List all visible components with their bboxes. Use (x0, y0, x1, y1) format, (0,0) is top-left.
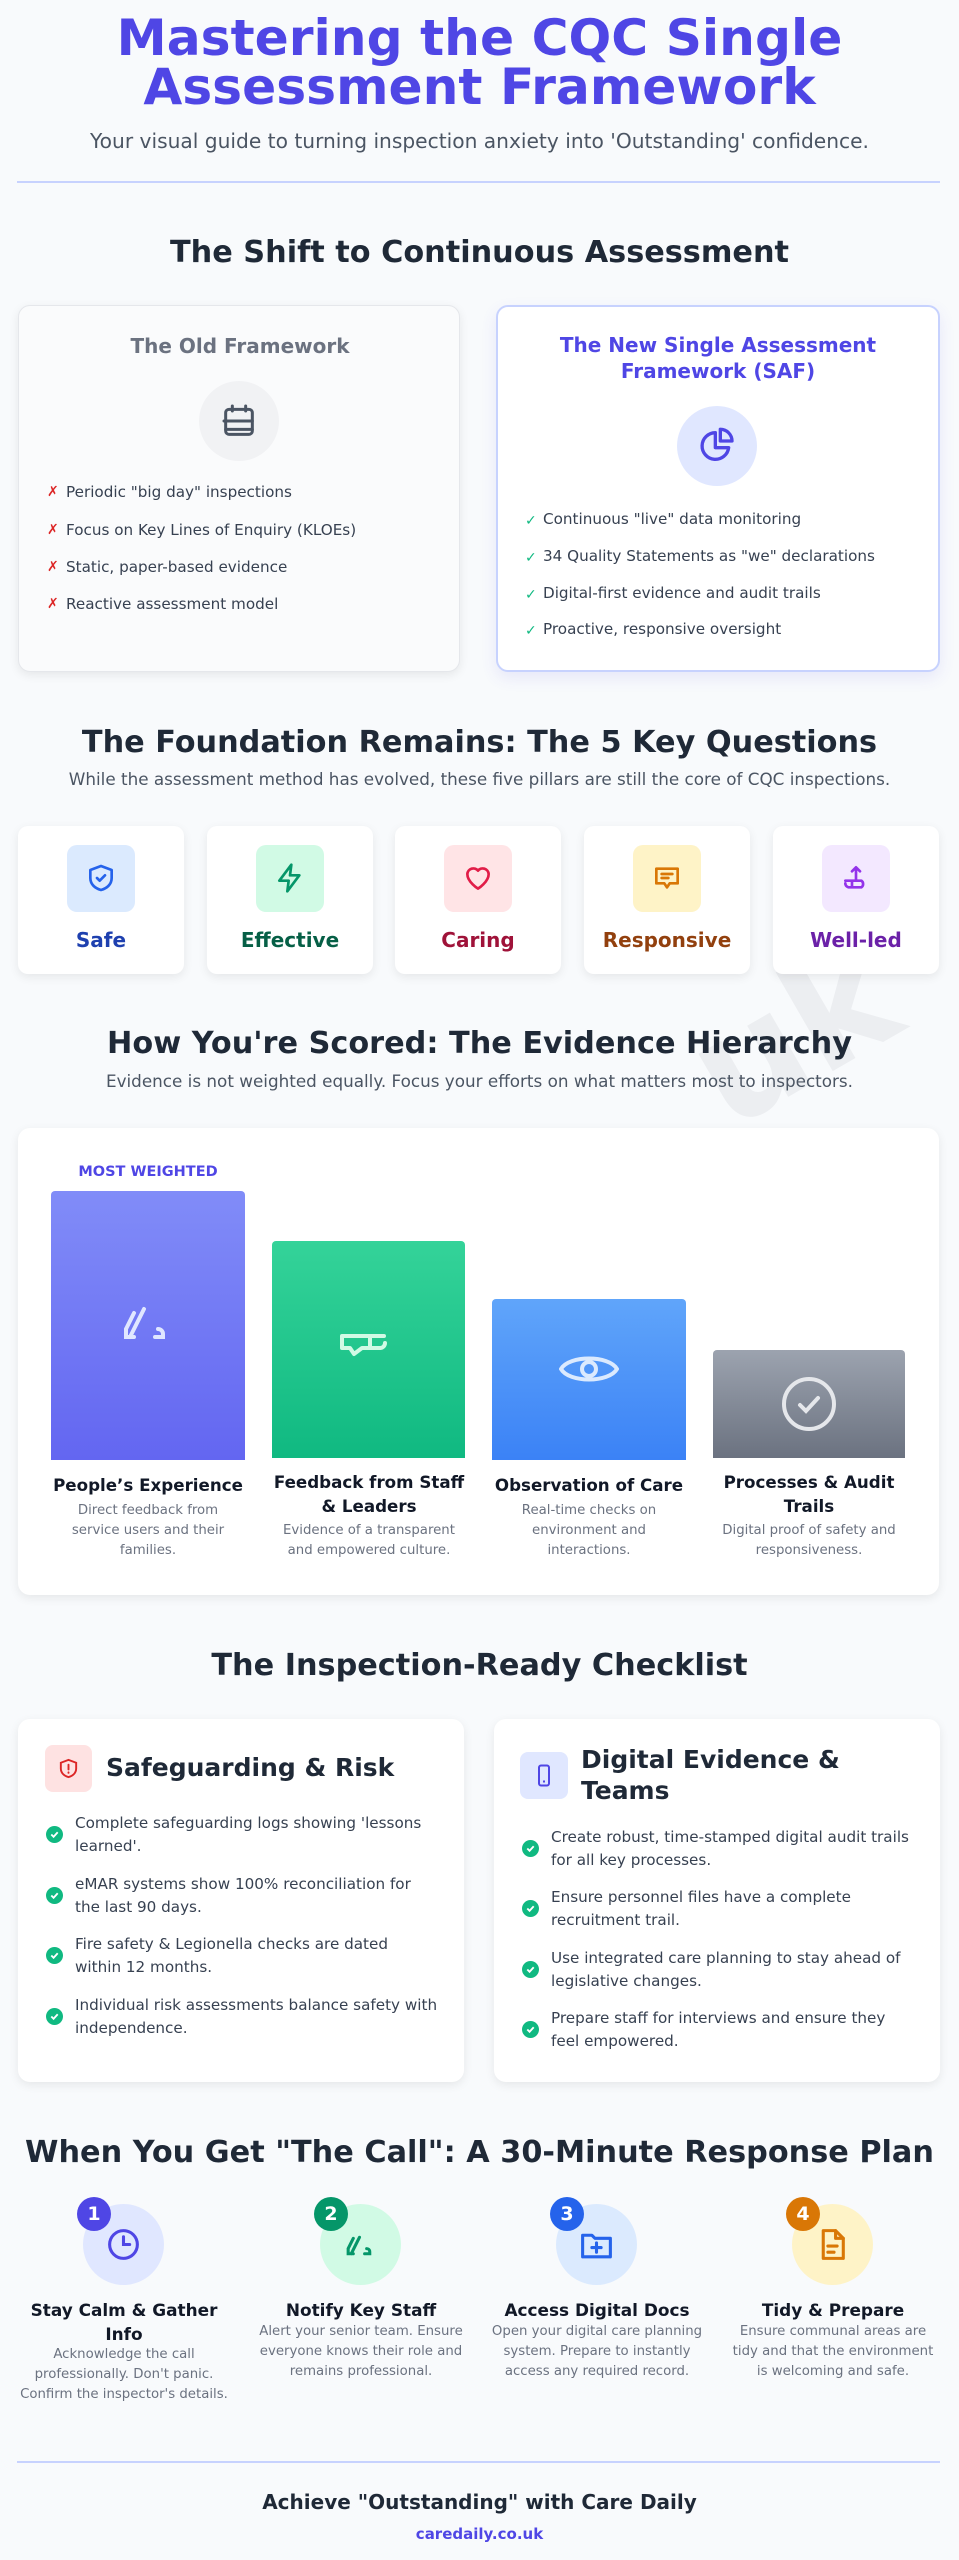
digital heading (581, 1745, 840, 1805)
icon: calendar (199, 381, 279, 461)
new title (560, 333, 876, 383)
new list: Continuous "live" data monitoring (543, 510, 801, 528)
new list: ✓ (525, 623, 537, 639)
bar: processes (713, 1350, 905, 1458)
bar: observation of care (492, 1299, 686, 1460)
step 2: everyone knows their role and (260, 2344, 462, 2359)
digital heading: Digital Evidence & (581, 1745, 840, 1774)
safeguarding list: Complete safeguarding logs showing 'lessons (75, 1814, 421, 1832)
step 1: Info (105, 2324, 143, 2344)
new list: 34 Quality Statements as "we" declarations (543, 547, 875, 565)
old list: Static, paper-based evidence (66, 558, 287, 576)
pillar: well-led (773, 826, 939, 974)
safeguarding list: Individual risk assessments balance safety with (75, 1996, 437, 2014)
new list: ✓ (525, 513, 537, 529)
step 4: is welcoming and safe. (757, 2364, 909, 2379)
bar label: processes: Trails (784, 1496, 834, 1516)
bar label: feedback: Evidence of a transparent (283, 1523, 455, 1538)
old list: Reactive assessment model (66, 595, 278, 613)
foundation subtitle: While the assessment method has evolved, these five pillars are still the core of CQC inspections. (69, 769, 890, 789)
step 3: access any required record. (505, 2364, 689, 2379)
step 3: 3 (560, 2203, 574, 2225)
old list: ✗ (47, 484, 59, 500)
step 3: Open your digital care planning (492, 2324, 702, 2339)
new title: The New Single Assessment (560, 333, 876, 357)
digital heading: Teams (581, 1776, 670, 1805)
old list: ✗ (47, 522, 59, 538)
step 1: Confirm the inspector's details. (20, 2387, 228, 2402)
digital list: recruitment trail. (551, 1911, 680, 1929)
new list (525, 510, 875, 639)
bar label: processes: Digital proof of safety and (722, 1523, 896, 1538)
subtitle: Your visual guide to turning inspection anxiety into 'Outstanding' confidence. (90, 129, 869, 153)
pillar: safe (18, 826, 184, 974)
step 2: Notify Key Staff (286, 2300, 436, 2320)
step 3: Access Digital Docs (504, 2300, 690, 2320)
safeguarding list: the last 90 days. (75, 1898, 202, 1916)
safeguarding heading: Safeguarding & Risk (106, 1753, 394, 1782)
step 2: remains professional. (290, 2364, 432, 2379)
bar label: people's experience: Direct feedback from (78, 1503, 218, 1518)
step 3 (492, 2197, 702, 2379)
panel: old framework (18, 305, 460, 672)
digital list: Use integrated care planning to stay ahead of (551, 1949, 901, 1967)
heading: checklist: The Inspection-Ready Checklist (211, 1648, 748, 1683)
safeguarding list: learned'. (75, 1837, 141, 1855)
step 4: Tidy & Prepare (762, 2300, 904, 2320)
bar label: observation (495, 1475, 683, 1558)
step 1: Stay Calm & Gather (31, 2300, 217, 2320)
bar label: people's experience: People’s Experience (53, 1475, 243, 1495)
bar label: processes: responsiveness. (756, 1543, 862, 1558)
icon: pie chart (677, 406, 757, 486)
icon: phone (520, 1752, 568, 1799)
bar label: feedback: and empowered culture. (288, 1543, 450, 1558)
step 1 (20, 2197, 228, 2402)
safeguarding list: independence. (75, 2019, 188, 2037)
panel: new framework (496, 305, 940, 672)
digital list: legislative changes. (551, 1972, 702, 1990)
footer: Achieve "Outstanding" with Care Daily (262, 2490, 697, 2514)
old list: ✗ (47, 559, 59, 575)
pillar: effective (207, 826, 373, 974)
digital list: Prepare staff for interviews and ensure they (551, 2009, 885, 2027)
pillar: caring (395, 826, 561, 974)
old title: The Old Framework (130, 334, 350, 358)
new list: Proactive, responsive oversight (543, 620, 781, 638)
bar label: observation: interactions. (547, 1543, 631, 1558)
bar label: feedback: & Leaders (322, 1496, 416, 1516)
heading: evidence hierarchy: How You're Scored: The Evidence Hierarchy (107, 1026, 852, 1061)
new list: ✓ (525, 550, 537, 566)
new title: Framework (SAF) (621, 359, 815, 383)
safeguarding list: eMAR systems show 100% reconciliation for (75, 1875, 411, 1893)
safeguarding list (46, 1814, 437, 2037)
step 4: 4 (796, 2203, 810, 2225)
heading: shift: The Shift to Continuous Assessment (170, 235, 789, 270)
pillar: responsive: Responsive (603, 928, 731, 952)
digital list: Ensure personnel files have a complete (551, 1888, 851, 1906)
step 1: 1 (87, 2203, 101, 2225)
bar: feedback from staff (272, 1241, 465, 1458)
title: Assessment Framework (143, 57, 816, 116)
safeguarding list: Fire safety & Legionella checks are dated (75, 1935, 388, 1953)
pillar: safe: Safe (76, 928, 126, 952)
digital list: feel empowered. (551, 2032, 679, 2050)
old list (47, 483, 356, 613)
title: Mastering the CQC Single (117, 8, 842, 67)
pillar: caring: Caring (441, 928, 515, 952)
title (117, 8, 842, 116)
bar label: people's experience: service users and their (72, 1523, 224, 1538)
step 4 (733, 2197, 933, 2379)
bar label: processes (722, 1472, 896, 1558)
old list: Focus on Key Lines of Enquiry (KLOEs) (66, 521, 356, 539)
footer: caredaily.co.uk (416, 2525, 543, 2543)
bar label: processes: Processes & Audit (724, 1472, 894, 1492)
panel: evidence bar chart (18, 1128, 939, 1595)
step 4: tidy and that the environment (733, 2344, 933, 2359)
bar label: people's experience (53, 1475, 243, 1558)
panel: digital evidence & teams (494, 1719, 940, 2082)
bar label: observation: Real-time checks on (522, 1503, 656, 1518)
footer (262, 2490, 697, 2543)
pillar: responsive (584, 826, 750, 974)
digital list (522, 1828, 909, 2050)
old list: ✗ (47, 596, 59, 612)
step 4: Ensure communal areas are (740, 2324, 926, 2339)
hierarchy subtitle: Evidence is not weighted equally. Focus your efforts on what matters most to inspectors. (106, 1071, 853, 1091)
heading: foundation: The Foundation Remains: The 5 Key Questions (82, 725, 877, 760)
pillar: effective: Effective (241, 928, 339, 952)
digital list: Create robust, time-stamped digital audit trails (551, 1828, 909, 1846)
bar label: observation: environment and (532, 1523, 646, 1538)
panel: safeguarding & risk (18, 1719, 464, 2082)
step 3: system. Prepare to instantly (503, 2344, 691, 2359)
most weighted label: MOST WEIGHTED (78, 1164, 218, 1180)
bar: people's experience (51, 1191, 245, 1460)
pillar: well-led: Well-led (810, 928, 902, 952)
heading: response plan: When You Get "The Call": A 30-Minute Response Plan (25, 2135, 934, 2170)
digital list: for all key processes. (551, 1851, 711, 1869)
bar label: observation: Observation of Care (495, 1475, 683, 1495)
icon: shield (45, 1745, 92, 1792)
step 1: Acknowledge the call (53, 2347, 195, 2362)
bar label: feedback (274, 1472, 464, 1558)
safeguarding list: within 12 months. (75, 1958, 212, 1976)
step 1: professionally. Don't panic. (35, 2367, 213, 2382)
step 2 (259, 2197, 463, 2379)
new list: ✓ (525, 587, 537, 603)
watermark: uk (660, 908, 926, 1162)
bar label: people's experience: families. (120, 1543, 176, 1558)
old list: Periodic "big day" inspections (66, 483, 292, 501)
bar label: feedback: Feedback from Staff (274, 1472, 464, 1492)
new list: Digital-first evidence and audit trails (543, 584, 821, 602)
step 2: Alert your senior team. Ensure (259, 2324, 463, 2339)
step 2: 2 (324, 2203, 338, 2225)
